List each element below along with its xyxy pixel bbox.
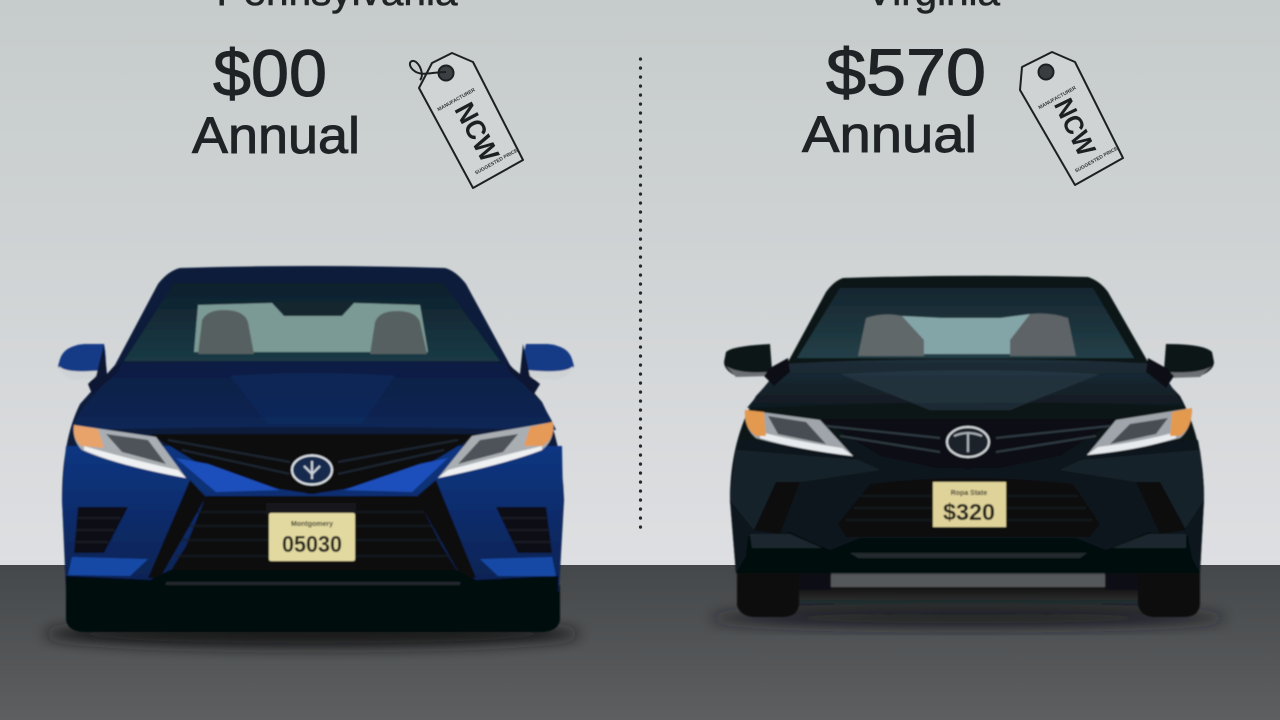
- mirror right: [1146, 344, 1214, 388]
- mirror right: [505, 344, 574, 394]
- bright blue accents: [176, 458, 448, 492]
- emblem: [289, 448, 335, 494]
- seat right: [1010, 314, 1076, 356]
- price: $00: $00: [213, 36, 327, 110]
- ground: [0, 565, 1280, 720]
- license plate: 05030: [282, 531, 342, 557]
- mirror left: [58, 344, 122, 394]
- seat left: [858, 314, 924, 356]
- license plate: Ropa State: [951, 490, 987, 497]
- lower grille: [838, 478, 1100, 537]
- grille upper V: [150, 434, 478, 494]
- windshield: [124, 283, 500, 361]
- bumper lip: [66, 570, 558, 592]
- license plate: [266, 503, 356, 561]
- background wall: [0, 0, 1280, 566]
- under-bumper strip: [829, 575, 1105, 587]
- car: blue sedan: [44, 266, 580, 648]
- headlight left: [745, 410, 853, 456]
- panel: Virginia: [710, 0, 1226, 628]
- hood: [747, 359, 1184, 408]
- icon: price tag: [410, 53, 523, 188]
- bumper lip: [736, 532, 1200, 573]
- emblem: [940, 427, 996, 470]
- mirror left: [724, 344, 790, 386]
- cabin view: [902, 314, 1030, 354]
- lighter side panels: [730, 450, 1204, 530]
- hood: [72, 361, 556, 430]
- icon: price tag: MANUFACTURER: [1038, 85, 1078, 111]
- lower blue lips: [68, 557, 556, 576]
- license plate: Montgomery: [291, 521, 333, 528]
- seat left: [198, 310, 254, 354]
- icon: price tag: [1020, 52, 1123, 185]
- icon: price tag: SUGGESTED PRICE: [474, 148, 520, 176]
- under-car shadow: [770, 585, 1170, 615]
- price: $570: $570: [826, 35, 986, 109]
- wheels: [737, 565, 1200, 617]
- icon: price tag: MANUFACTURER: [437, 87, 477, 113]
- body silhouette: [730, 276, 1204, 573]
- headlight right: [1087, 408, 1192, 455]
- label: Annual: Annual: [192, 107, 360, 164]
- body silhouette: [62, 266, 564, 590]
- icon: price tag: NCW: [449, 97, 505, 167]
- lower body and wheels: [66, 585, 560, 632]
- license plate: $320: [943, 499, 995, 525]
- side vent right: [496, 507, 552, 553]
- black frame lines of grille: [148, 480, 476, 578]
- panel: Pennsylvania: [44, 0, 580, 648]
- license plate: [933, 482, 1006, 527]
- icon: price tag: NCW: [1048, 94, 1102, 161]
- side vent right: [1136, 482, 1186, 534]
- bumper: [730, 440, 1204, 573]
- side vent left: [754, 482, 800, 534]
- grille upper: [820, 419, 1118, 468]
- side vent left: [74, 507, 128, 553]
- headlight left: [74, 425, 186, 478]
- divider: dotted line: [639, 59, 642, 532]
- windshield: [797, 288, 1134, 358]
- label: Annual: Annual: [802, 106, 977, 163]
- contact shadow: [44, 620, 580, 648]
- headlight right: [438, 422, 553, 478]
- seat right: [370, 311, 427, 354]
- icon: price tag: SUGGESTED PRICE: [1074, 146, 1120, 174]
- car: black sedan: [710, 276, 1226, 628]
- lower grille: [170, 496, 458, 572]
- contact shadow: [710, 608, 1226, 628]
- bumper: [62, 446, 563, 592]
- rear-view mirror: [274, 302, 354, 316]
- cabin view: [194, 303, 428, 352]
